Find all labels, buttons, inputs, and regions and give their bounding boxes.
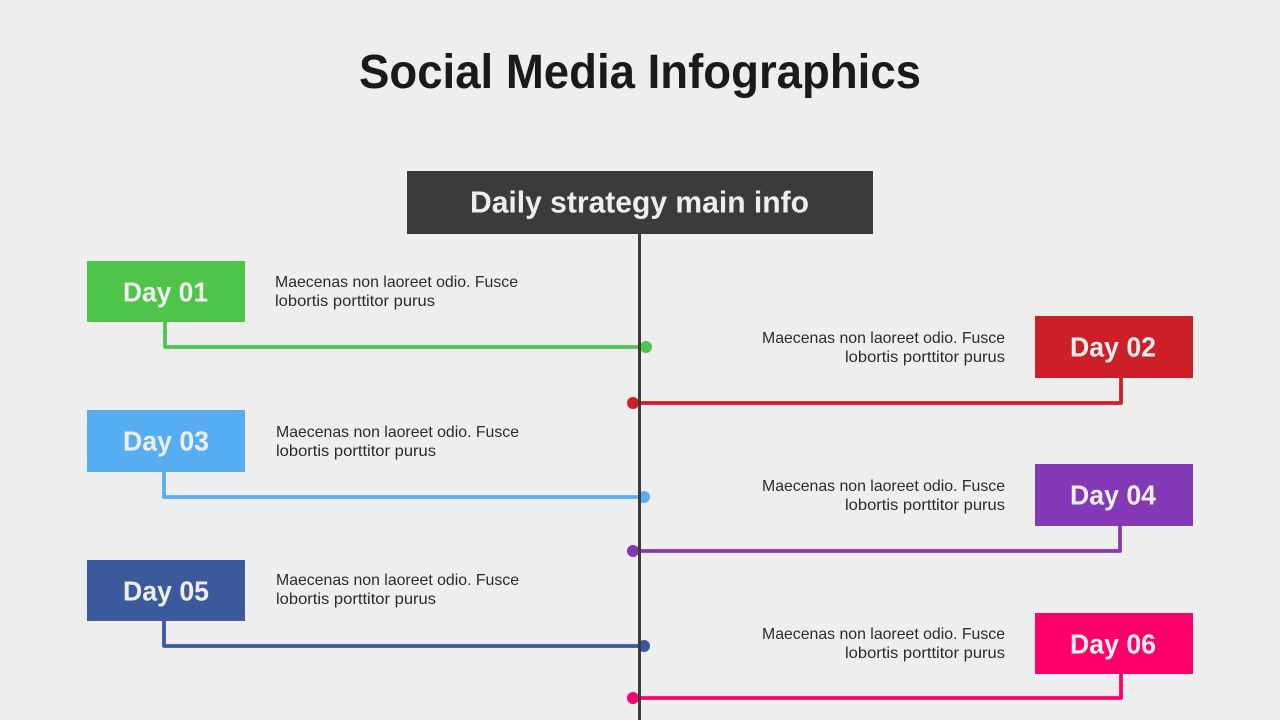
day 01 description xyxy=(275,274,518,310)
day 04 connector xyxy=(627,526,1120,557)
day 03 description: Maecenas non laoreet odio. Fusce xyxy=(276,424,519,441)
day 06 description: Maecenas non laoreet odio. Fusce xyxy=(762,626,1005,643)
panel: day 04 xyxy=(627,464,1193,557)
day 01 description: Maecenas non laoreet odio. Fusce xyxy=(275,274,518,291)
day 02 label box: Day 02 xyxy=(1070,332,1156,363)
day 01 label box xyxy=(87,261,245,322)
day 05 connector xyxy=(164,621,650,652)
day 05 label box xyxy=(87,560,245,621)
header box: daily strategy: Daily strategy main info xyxy=(470,184,809,219)
day 05 description: lobortis porttitor purus xyxy=(276,591,436,608)
day 01 description: lobortis porttitor purus xyxy=(275,293,435,310)
day 03 connector xyxy=(164,472,650,503)
panel: day 06 xyxy=(627,613,1193,704)
day 02 connector xyxy=(627,378,1121,409)
panel: day 02 xyxy=(627,316,1193,409)
day 02 label box xyxy=(1035,316,1193,378)
day 02 description: lobortis porttitor purus xyxy=(845,349,1005,366)
day 04 label box: Day 04 xyxy=(1070,480,1157,511)
title: Social Media Infographics xyxy=(359,46,921,99)
day 03 label box: Day 03 xyxy=(123,426,209,457)
day 04 description xyxy=(762,478,1005,514)
header box: daily strategy xyxy=(407,171,873,234)
day 03 label box xyxy=(87,410,245,472)
panel: day 05 xyxy=(87,560,650,652)
day 01 label box: Day 01 xyxy=(123,277,208,308)
day 06 description: lobortis porttitor purus xyxy=(845,645,1005,662)
day 03 description: lobortis porttitor purus xyxy=(276,443,436,460)
day 02 description: Maecenas non laoreet odio. Fusce xyxy=(762,330,1005,347)
day 04 label box xyxy=(1035,464,1193,526)
panel: day 01 xyxy=(87,261,652,353)
day 04 description: lobortis porttitor purus xyxy=(845,497,1005,514)
day 06 description xyxy=(762,626,1005,662)
day 06 label box: Day 06 xyxy=(1070,629,1156,660)
day 05 description: Maecenas non laoreet odio. Fusce xyxy=(276,572,519,589)
day 03 description xyxy=(276,424,519,460)
day 06 connector xyxy=(627,674,1121,704)
central timeline spine xyxy=(638,234,641,720)
day 04 description: Maecenas non laoreet odio. Fusce xyxy=(762,478,1005,495)
panel: day 03 xyxy=(87,410,650,503)
day 05 label box: Day 05 xyxy=(123,576,209,607)
day 06 label box xyxy=(1035,613,1193,674)
day 05 description xyxy=(276,572,519,608)
day 01 connector xyxy=(165,322,652,353)
day 02 description xyxy=(762,330,1005,366)
